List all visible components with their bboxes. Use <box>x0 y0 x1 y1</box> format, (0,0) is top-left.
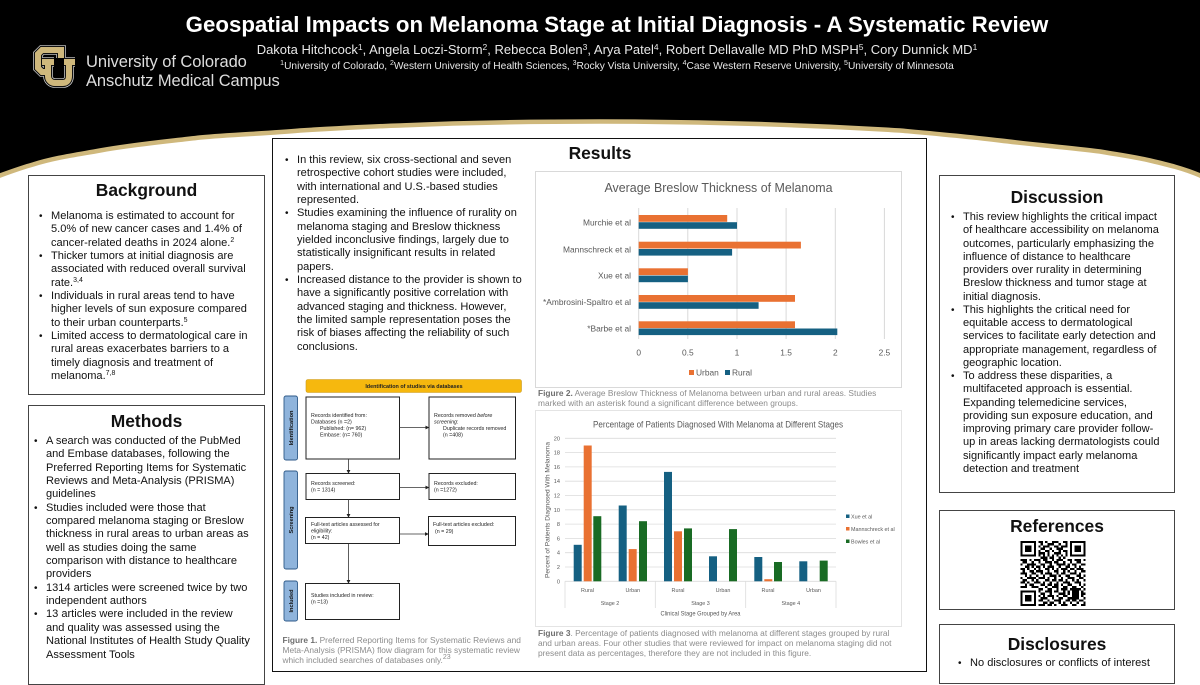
methods bullets <box>34 435 250 660</box>
discussion bullets: outcomes, particularly emphasizing the <box>963 238 1154 250</box>
methods bullets: Reviews and Meta-Analysis (PRISMA) <box>46 475 234 487</box>
box: studies included: Studies included in review: <box>311 593 374 599</box>
urban bars <box>639 215 801 328</box>
box: records screened <box>306 474 400 500</box>
results intro bullets: yielded inconclusive findings, largely due to <box>297 234 509 246</box>
rural bars <box>639 222 837 335</box>
box: records removed: screening: <box>434 420 458 426</box>
results intro bullets: papers. <box>297 261 334 273</box>
box: records screened: (n = 1314) <box>311 488 336 494</box>
results intro bullets: advanced staging and thickness. However, <box>297 301 506 313</box>
legend: Mannschreck et al <box>851 527 895 533</box>
box: records removed <box>429 397 516 459</box>
panel: references <box>939 510 1175 610</box>
box: full-text excluded: Full-text articles excluded: <box>433 522 494 528</box>
stage labels: Stage 4 <box>782 601 800 607</box>
stage labels <box>601 601 800 607</box>
box: records identified: Records identified from: <box>311 413 367 419</box>
stage label: included <box>284 581 298 621</box>
methods bullets: and Embase databases, following the <box>46 448 230 460</box>
methods bullets: providers <box>46 568 91 580</box>
background bullets: Individuals in rural areas tend to have <box>51 290 235 302</box>
background bullets: Thicker tumors at initial diagnosis are <box>51 250 233 262</box>
results intro bullets: the limited sample representation poses the <box>297 314 511 326</box>
discussion bullets: providing sun exposure education, and <box>963 410 1153 422</box>
stage labels: Stage 3 <box>691 601 710 607</box>
logo: University of Colorado Anschutz Medical Campus <box>33 45 280 90</box>
y axis labels: 20 <box>554 436 560 442</box>
figure 1 caption: Meta-Analysis (PRISMA) flow diagram for this systematic review <box>282 645 520 655</box>
methods bullets: 13 articles were included in the review <box>46 608 233 620</box>
logo wordmark <box>86 53 280 90</box>
category labels: Murchie et al <box>583 218 631 228</box>
title: Geospatial Impacts on Melanoma Stage at Initial Diagnosis - A Systematic Review <box>186 12 1048 37</box>
y axis labels: 4 <box>557 551 560 557</box>
background bullets: timely diagnosis and treatment of <box>51 357 213 369</box>
area labels <box>581 588 821 594</box>
heading: methods: Methods <box>111 411 182 431</box>
legend <box>689 368 752 378</box>
box: records identified: Published: (n= 962) <box>320 426 366 432</box>
icon: CU interlocking mark <box>33 45 75 88</box>
background bullets: melanoma.7,8 <box>51 370 115 382</box>
results intro bullets <box>285 154 522 353</box>
discussion bullets <box>951 211 1160 475</box>
figure 1 caption: which included searches of databases only.23 <box>282 654 451 665</box>
legend: Rural <box>732 368 752 378</box>
discussion bullets: significantly impact early melanoma <box>963 450 1137 462</box>
background bullets: 5.0% of new cancer cases and 1.4% of <box>51 223 242 235</box>
bar chart: average Breslow thickness <box>535 171 902 388</box>
y axis labels: 6 <box>557 536 560 542</box>
heading: background: Background <box>96 180 197 200</box>
heading: references: References <box>1010 516 1104 536</box>
logo wordmark: University of Colorado <box>86 53 247 71</box>
results intro bullets: retrospective cohort studies were included, <box>297 167 506 179</box>
affiliations: 1University of Colorado, 2Western University of Health Sciences, 3Rocky Vista University, 4Case Western Reserve University, 5University of Minnesota <box>280 60 954 72</box>
box: full-text assessed: (n = 42) <box>311 535 330 541</box>
stage label: included: Included <box>289 589 295 612</box>
QR code <box>1020 541 1086 606</box>
figure 3 caption: present data as percentages, therefore they are not included in this figure. <box>538 648 811 658</box>
logo wordmark: Anschutz Medical Campus <box>86 72 280 90</box>
methods bullets: comparison with distance to healthcare <box>46 555 237 567</box>
box: records excluded <box>429 474 516 500</box>
methods bullets: 1314 articles were screened twice by two <box>46 582 247 594</box>
value axis labels: 0.5 <box>682 348 694 358</box>
stage labels: Stage 2 <box>601 601 619 607</box>
category labels: *Barbe et al <box>587 324 631 334</box>
methods bullets: Studies included were those that <box>46 502 206 514</box>
background bullets: rate.3,4 <box>51 277 83 289</box>
results intro bullets: conclusions. <box>297 341 358 353</box>
header band with curved gold edge <box>0 0 1200 178</box>
results intro bullets: Studies examining the influence of rurality on <box>297 207 517 219</box>
stage label: screening <box>284 471 298 569</box>
category labels: Xue et al <box>598 270 631 280</box>
box: records identified <box>306 397 400 459</box>
area labels: Rural <box>672 588 684 594</box>
y axis labels: 12 <box>554 494 560 500</box>
discussion bullets: Breslow thickness and tumor stage at <box>963 277 1147 289</box>
y axis labels: 8 <box>557 522 560 528</box>
category labels <box>543 218 631 334</box>
Xue et al bars <box>574 472 807 581</box>
value axis labels <box>636 348 891 358</box>
figure 3 caption: Figure 3. Percentage of patients diagnosed with melanoma at different stages grouped by rural <box>538 628 889 638</box>
discussion bullets: appropriate management, regardless of <box>963 344 1156 356</box>
figure 2 caption <box>538 388 876 408</box>
area labels: Urban <box>625 588 640 594</box>
box: studies included: (n =13) <box>311 600 328 606</box>
authors: Dakota Hitchcock1, Angela Loczi-Storm2, Rebecca Bolen3, Arya Patel4, Robert Dellavalle MD PhD MSPH5, Cory Dunnick MD1 <box>257 42 977 57</box>
panel: discussion <box>939 175 1175 493</box>
value axis labels: 1 <box>735 348 740 358</box>
background bullets: to their urban counterparts.5 <box>51 317 188 329</box>
methods bullets: guidelines <box>46 488 96 500</box>
heading: disclosures: Disclosures <box>1008 634 1106 654</box>
area labels: Rural <box>581 588 594 594</box>
banner: identification of studies <box>306 380 522 392</box>
discussion bullets: This review highlights the critical impact <box>963 211 1157 223</box>
box: records excluded: (n =1272) <box>434 488 457 494</box>
methods bullets: compared melanoma staging or Breslow <box>46 515 244 527</box>
legend: Xue et al <box>851 514 872 520</box>
methods bullets: A search was conducted of the PubMed <box>46 435 241 447</box>
methods bullets: and quality was assessed using the <box>46 622 220 634</box>
discussion bullets: This highlights the critical need for <box>963 304 1130 316</box>
box: studies included <box>306 584 400 620</box>
discussion bullets: detection and treatment <box>963 463 1079 475</box>
discussion bullets: multifaceted approach is essential. <box>963 383 1132 395</box>
value axis labels: 2.5 <box>879 348 891 358</box>
panel: disclosures <box>939 624 1175 684</box>
box: full-text assessed: Full-text articles assessed for <box>311 522 380 528</box>
value axis labels: 2 <box>833 348 838 358</box>
background bullets: higher levels of sun exposure compared <box>51 303 247 315</box>
category labels: Mannschreck et al <box>563 244 631 254</box>
background bullets: associated with reduced overall survival <box>51 263 246 275</box>
methods bullets: Assessment Tools <box>46 648 135 660</box>
flow arrows <box>348 428 428 583</box>
box: full-text excluded <box>428 516 516 546</box>
discussion bullets: up in areas lacking dermatologists could <box>963 436 1160 448</box>
legend: Bowles et al <box>851 539 880 545</box>
methods bullets: Preferred Reporting Items for Systematic <box>46 462 246 474</box>
box: full-text assessed: eligibility: <box>311 528 332 534</box>
figure 1 caption: Figure 1. Preferred Reporting Items for Systematic Reviews and <box>282 635 521 645</box>
background bullets: Limited access to dermatological care in <box>51 330 247 342</box>
background bullets <box>39 210 247 382</box>
category labels: *Ambrosini-Spaltro et al <box>543 297 631 307</box>
figure 3 caption: and urban areas. Four other studies that were reviewed for impact on melanoma staging did not <box>538 638 891 648</box>
background bullets: rural areas exacerbates barriers to a <box>51 343 229 355</box>
discussion bullets: equitable access to dermatological <box>963 317 1132 329</box>
discussion bullets: providers over rurality in determining <box>963 264 1142 276</box>
box: records removed: Duplicate records removed <box>443 426 506 432</box>
box: records removed: (n =408) <box>443 432 463 438</box>
figure 2 caption: marked with an asterisk found a significant difference between groups. <box>538 398 798 408</box>
PRISMA flow diagram <box>284 379 522 622</box>
discussion bullets: influence of distance to healthcare <box>963 251 1131 263</box>
results intro bullets: Increased distance to the provider is shown to <box>297 274 522 286</box>
y axis labels: 14 <box>554 479 560 485</box>
box: records excluded: Records excluded: <box>434 481 478 487</box>
heading: discussion: Discussion <box>1011 187 1103 207</box>
discussion bullets: Expanding telemedicine services, <box>963 396 1127 408</box>
discussion bullets: To address these disparities, a <box>963 370 1112 382</box>
y axis labels <box>554 436 560 585</box>
banner: identification of studies: Identification of studies via databases <box>365 384 463 390</box>
box: full-text excluded: (n = 29) <box>435 529 454 535</box>
area labels: Rural <box>762 588 774 594</box>
methods bullets: National Institutes of Health Study Quality <box>46 635 250 647</box>
box: full-text assessed <box>306 518 400 544</box>
Mannschreck et al bars <box>584 446 772 581</box>
y axis labels: 10 <box>554 508 560 514</box>
results intro bullets: In this review, six cross-sectional and seven <box>297 154 511 166</box>
y axis title: Percent of Patients Diagnosed With Melanoma <box>544 441 552 578</box>
methods bullets: thickness in rural areas to urban areas as <box>46 528 249 540</box>
results intro bullets: statistically insignificant results in related <box>297 247 495 259</box>
panel: methods <box>28 405 265 685</box>
results intro bullets: melanoma staging and Breslow thickness <box>297 221 500 233</box>
methods bullets: independent authors <box>46 595 147 607</box>
results intro bullets: with international and U.S.-based studies <box>297 181 498 193</box>
panel: background <box>28 175 265 395</box>
value axis labels: 0 <box>636 348 641 358</box>
y axis labels: 16 <box>554 465 560 471</box>
results intro bullets: represented. <box>297 194 359 206</box>
legend: Urban <box>696 368 719 378</box>
legend <box>846 514 895 545</box>
results intro bullets: risk of biases affecting the reliability of such <box>297 327 509 339</box>
results intro bullets: have a significantly positive correlation with <box>297 287 508 299</box>
disclosures bullet: No disclosures or conflicts of interest <box>970 657 1150 669</box>
y axis labels: 2 <box>557 565 560 571</box>
stage label: screening: Screening <box>289 506 295 534</box>
box: records removed: Records removed before <box>434 413 492 419</box>
box: records identified: Embase: (n= 760) <box>320 432 362 438</box>
discussion bullets: geographic location. <box>963 357 1062 369</box>
background bullets: cancer-related deaths in 2024 alone.2 <box>51 237 234 249</box>
figure 1 caption <box>282 635 521 665</box>
background bullets: Melanoma is estimated to account for <box>51 210 235 222</box>
value axis labels: 1.5 <box>780 348 792 358</box>
methods bullets: well as studies doing the same <box>46 542 196 554</box>
box: records screened: Records screened: <box>311 481 355 487</box>
y axis labels: 0 <box>557 579 560 585</box>
heading: results: Results <box>569 143 631 163</box>
discussion bullets: services to facilitate early detection and <box>963 330 1156 342</box>
area labels: Urban <box>806 588 821 594</box>
Bowles et al bars <box>593 516 828 581</box>
discussion bullets: improving primary care provider follow- <box>963 423 1153 435</box>
figure 2 caption: Figure 2. Average Breslow Thickness of Melanoma between urban and rural areas. Studies <box>538 388 876 398</box>
chart title: Percentage of Patients Diagnosed With Melanoma at Different Stages <box>593 420 843 430</box>
figure 3 caption <box>538 628 892 658</box>
y axis labels: 18 <box>554 451 560 457</box>
stage label: identification: Identification <box>289 410 295 445</box>
discussion bullets: initial diagnosis. <box>963 290 1041 302</box>
chart title: Average Breslow Thickness of Melanoma <box>604 181 832 195</box>
discussion bullets: of healthcare accessibility on melanoma <box>963 224 1159 236</box>
stage label: identification <box>284 396 298 460</box>
x axis title: Clinical Stage Grouped by Area <box>660 610 741 618</box>
area labels: Urban <box>716 588 730 594</box>
panel: results <box>272 138 927 672</box>
column chart: percentage by stage <box>535 410 902 627</box>
box: records identified: Databases (n =2) <box>311 420 352 426</box>
